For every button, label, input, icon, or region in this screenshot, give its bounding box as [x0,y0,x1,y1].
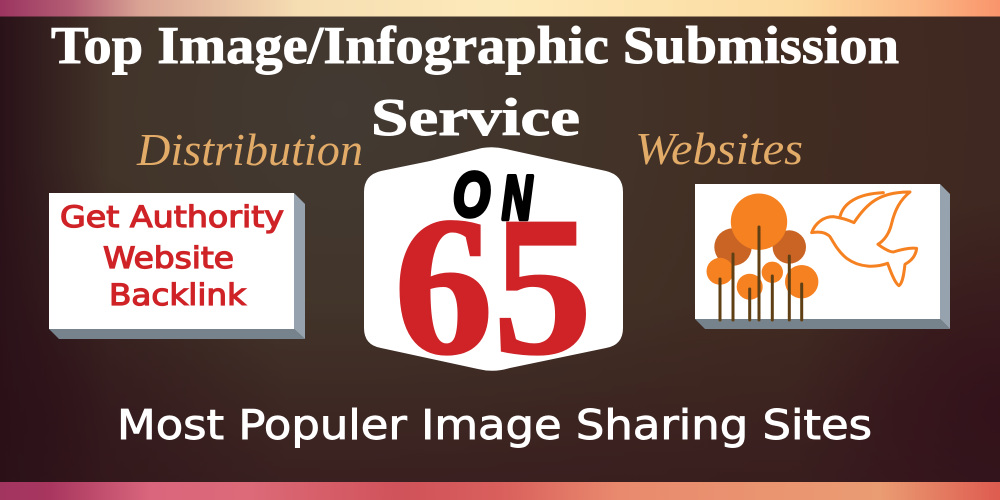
script label: Distribution: Distribution [136,125,363,175]
title [51,17,899,147]
hand-lettered ON: N [502,164,533,233]
panel: backlink box [49,193,305,339]
backlink text: Get Authority [60,200,284,234]
backlink text [60,200,284,312]
title: Top Image/Infographic Submission [51,17,899,75]
top colour band [0,0,1000,16]
icon: bird outline [812,192,917,286]
script label: Websites: Websites [635,124,803,174]
bottom caption: Most Populer Image Sharing Sites [117,401,872,449]
title: Service [371,89,580,147]
backlink text: Backlink [109,278,246,312]
backlink text: Website [103,241,234,275]
bottom colour band [0,482,1000,500]
panel: illustration box [695,184,950,329]
hand-lettered ON [453,161,533,233]
hand-lettered ON: O [453,161,490,230]
icon: orange trees [706,194,818,320]
panel: central hexagon badge [364,147,623,396]
big number 65: 65 [394,176,592,396]
